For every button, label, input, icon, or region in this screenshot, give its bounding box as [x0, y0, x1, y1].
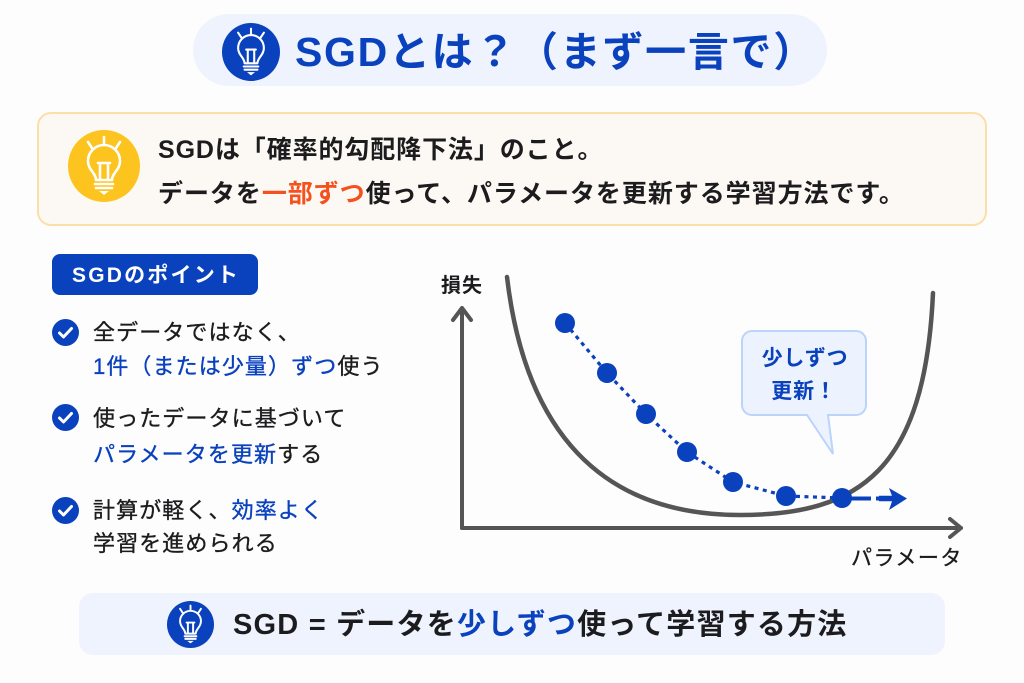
icon: check [52, 319, 79, 346]
point 1 text [93, 320, 384, 379]
point 1 text: 全データではなく、 [93, 320, 301, 345]
panel: point list [52, 319, 384, 556]
point 2 [52, 404, 346, 467]
summary text: SGD = データを少しずつ使って学習する方法 [233, 609, 848, 641]
definition line 1: SGDは「確率的勾配降下法」のこと。 [158, 136, 603, 164]
title text: SGDとは？（まず一言で） [295, 29, 816, 75]
panel: summary bar [79, 593, 945, 655]
direction arrow [850, 488, 907, 510]
axes [453, 308, 961, 537]
icon: summary light bulb [167, 601, 214, 648]
speech bubble [742, 331, 866, 454]
heading: SGD points badge [52, 254, 258, 295]
update dots [555, 313, 852, 508]
point 1 text: 1件（または少量）ずつ使う [93, 354, 384, 379]
point 2 text [93, 406, 346, 467]
definition line 2: データを一部ずつ使って、パラメータを更新する学習方法です。 [158, 180, 905, 208]
panel: definition callout [37, 112, 987, 226]
icon: check [52, 404, 79, 431]
x axis label: パラメータ [851, 547, 963, 570]
speech bubble: 少しずつ [762, 347, 848, 370]
point 3 text: 学習を進められる [93, 531, 278, 556]
icon: yellow light bulb [68, 130, 140, 202]
point 3 [52, 497, 324, 556]
icon: title light bulb [222, 23, 280, 81]
speech bubble: 更新！ [771, 380, 837, 403]
point 3 text: 計算が軽く、効率よく [93, 498, 324, 523]
point 2 text: パラメータを更新する [93, 442, 323, 467]
descent path [565, 323, 842, 498]
point 3 text [93, 498, 324, 556]
title banner [193, 14, 827, 86]
point 1 [52, 319, 384, 379]
loss curve [507, 277, 933, 515]
icon: check [52, 497, 79, 524]
y axis label: 損失 [441, 274, 483, 297]
badge label: SGDのポイント [72, 264, 240, 287]
point 2 text: 使ったデータに基づいて [93, 406, 346, 431]
